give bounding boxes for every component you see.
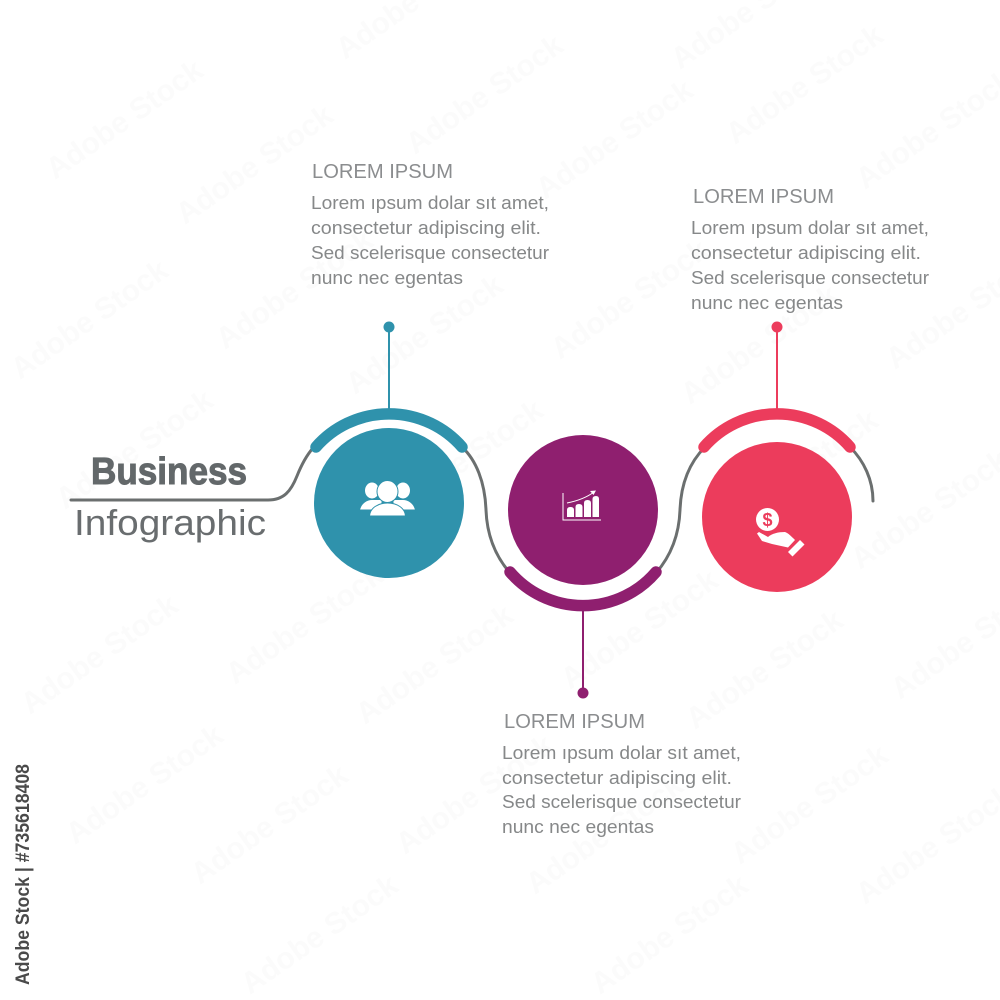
text block 2: consectetur adipiscing elit. [502, 767, 732, 788]
watermark pattern: Adobe Stock [60, 718, 229, 851]
watermark pattern: Adobe Stock [50, 383, 219, 516]
watermark pattern: Adobe Stock [185, 758, 354, 891]
watermark pattern: Adobe Stock [390, 728, 559, 861]
text block 1: Sed scelerisque consectetur [311, 242, 549, 263]
text block 2: Lorem ıpsum dolar sıt amet, [502, 742, 741, 763]
watermark pattern: Adobe Stock [340, 268, 509, 401]
watermark pattern: Adobe Stock [5, 253, 174, 386]
text block 2: nunc nec egentas [502, 816, 654, 837]
watermark pattern: Adobe Stock [210, 223, 379, 356]
icon: hand holding coin: $ [762, 510, 773, 530]
watermark pattern: Adobe Stock [380, 393, 549, 526]
text block 1: nunc nec egentas [311, 267, 463, 288]
watermark pattern: Adobe Stock [585, 868, 754, 1000]
watermark pattern: Adobe Stock [725, 738, 894, 871]
icon: people [360, 480, 416, 516]
text block 2: Sed scelerisque consectetur [502, 791, 741, 812]
watermark pattern: Adobe Stock [530, 73, 699, 206]
watermark pattern: Adobe Stock [400, 28, 569, 161]
step 3: red circle with money hand icon [702, 322, 852, 592]
watermark pattern: Adobe Stock [675, 278, 844, 411]
stock credit: Adobe Stock | #735618408 [13, 764, 34, 985]
title: Business Infographic: Infographic [74, 502, 266, 543]
text block 3: LOREM IPSUM [693, 186, 834, 208]
text block 1: LOREM IPSUM [312, 161, 453, 183]
icon: bar chart [563, 490, 601, 520]
watermark pattern: Adobe Stock [40, 53, 209, 186]
watermark pattern: Adobe Stock [235, 868, 404, 1000]
watermark pattern: Adobe Stock [170, 98, 339, 231]
watermark pattern: Adobe Stock [680, 603, 849, 736]
watermark pattern: Adobe Stock [545, 233, 714, 366]
text block 3: nunc nec egentas [691, 292, 843, 313]
text block 2: LOREM IPSUM [504, 711, 645, 733]
watermark pattern: Adobe Stock [520, 768, 689, 901]
title: Business Infographic: Business [91, 451, 247, 493]
text block 2 [502, 711, 741, 837]
title: Business Infographic [74, 451, 266, 543]
watermark pattern: Adobe Stock [350, 598, 519, 731]
text block 1: Lorem ıpsum dolar sıt amet, [311, 192, 549, 213]
text block 3: Sed scelerisque consectetur [691, 267, 929, 288]
watermark pattern: Adobe Stock [15, 588, 184, 721]
icon: hand holding coin [756, 508, 804, 556]
watermark pattern: Adobe Stock [720, 18, 889, 151]
watermark pattern: Adobe Stock [220, 558, 389, 691]
connecting gray line [71, 447, 873, 573]
watermark pattern: Adobe Stock [555, 563, 724, 696]
text block 3 [691, 186, 929, 313]
text block 3: consectetur adipiscing elit. [691, 242, 921, 263]
step 2: purple circle with chart icon [508, 435, 658, 698]
text block 3: Lorem ıpsum dolar sıt amet, [691, 217, 929, 238]
text block 1: consectetur adipiscing elit. [311, 217, 541, 238]
watermark pattern: Adobe Stock [715, 403, 884, 536]
text block 1 [311, 161, 549, 288]
step 1: teal circle with people icon [314, 322, 464, 578]
